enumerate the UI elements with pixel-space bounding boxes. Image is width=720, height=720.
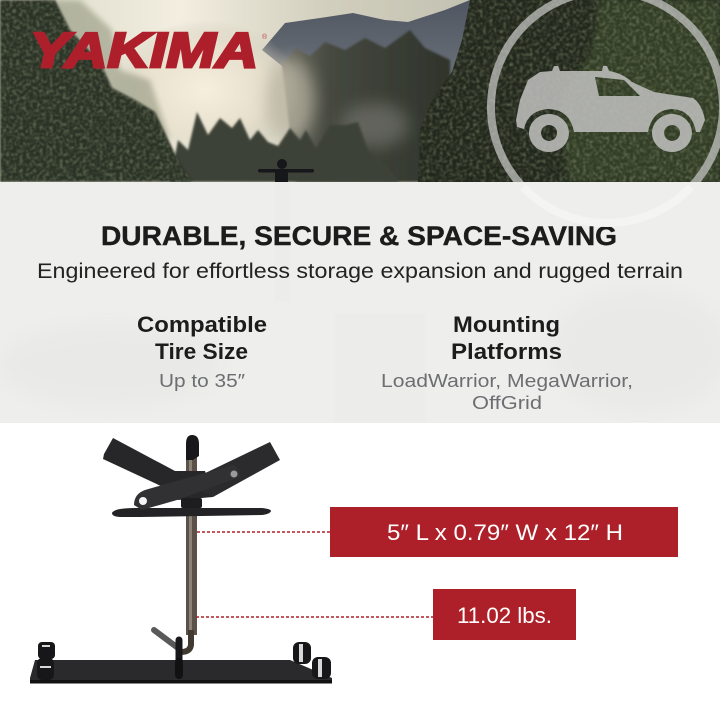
dimensions box xyxy=(330,507,678,557)
foreground conifers xyxy=(170,112,400,182)
icon: vehicle in circle xyxy=(491,0,720,223)
heading: DURABLE, SECURE & SPACE-SAVING xyxy=(101,221,617,251)
logo: YAKIMA: ® xyxy=(262,33,268,41)
nut xyxy=(181,498,202,508)
spec: tire size xyxy=(137,312,267,391)
rod hook xyxy=(181,630,191,652)
bicycle handlebar xyxy=(258,159,314,182)
right trees xyxy=(418,0,720,182)
faded photo ghost xyxy=(0,182,720,423)
spec: mounting platforms: LoadWarrior, MegaWarrior, xyxy=(381,371,633,391)
spec: mounting platforms: Mounting xyxy=(453,312,560,337)
spec: tire size: Up to 35″ xyxy=(159,371,246,391)
callout: weight xyxy=(196,589,576,640)
logo: YAKIMA: YAKIMA xyxy=(30,24,258,78)
weight box xyxy=(433,589,576,640)
threaded rod xyxy=(186,455,197,635)
left cradle arm xyxy=(103,438,213,500)
top plate xyxy=(112,508,271,517)
lit foliage on right xyxy=(560,0,720,182)
base vertical post xyxy=(175,662,183,675)
pivot holes xyxy=(139,497,147,505)
leader line xyxy=(197,531,330,533)
left trees xyxy=(0,0,192,182)
panel background xyxy=(0,182,720,423)
spec: mounting platforms: OffGrid xyxy=(472,393,542,413)
spec: tire size: Compatible xyxy=(137,312,267,337)
arm strap xyxy=(134,465,240,510)
callout: dimensions xyxy=(197,507,678,557)
sky xyxy=(0,0,470,182)
base plate xyxy=(30,660,332,683)
mist band at forest edge xyxy=(266,58,314,142)
distant mountain xyxy=(262,0,470,76)
central forest ridge xyxy=(282,30,450,182)
hero photo: misty forest xyxy=(0,0,720,182)
base loop xyxy=(176,640,182,676)
ring fade over panel xyxy=(523,187,691,223)
rod thread highlight xyxy=(189,455,192,635)
vehicle xyxy=(516,66,705,152)
base front edge xyxy=(30,680,332,684)
leader line xyxy=(196,616,433,618)
angled peg xyxy=(154,630,178,648)
product photo: tire carrier bracket xyxy=(30,435,332,684)
weight text: 11.02 lbs. xyxy=(457,603,552,628)
info panel xyxy=(0,182,720,423)
subheading: Engineered for effortless storage expansion and rugged terrain xyxy=(37,260,683,283)
spec: tire size: Tire Size xyxy=(155,339,248,364)
spec: mounting platforms xyxy=(381,312,633,413)
mist glow xyxy=(127,28,288,148)
left tree fringe xyxy=(40,0,170,140)
dimensions text: 5″ L x 0.79″ W x 12″ H xyxy=(387,520,623,545)
left clamps xyxy=(37,642,55,680)
rod tip cap xyxy=(186,435,199,460)
foliage texture xyxy=(0,0,720,182)
ring xyxy=(487,0,720,182)
right clamps xyxy=(293,642,331,679)
spec: mounting platforms: Platforms xyxy=(451,339,562,364)
right cradle arm xyxy=(193,442,280,497)
mist within forest xyxy=(341,103,409,147)
